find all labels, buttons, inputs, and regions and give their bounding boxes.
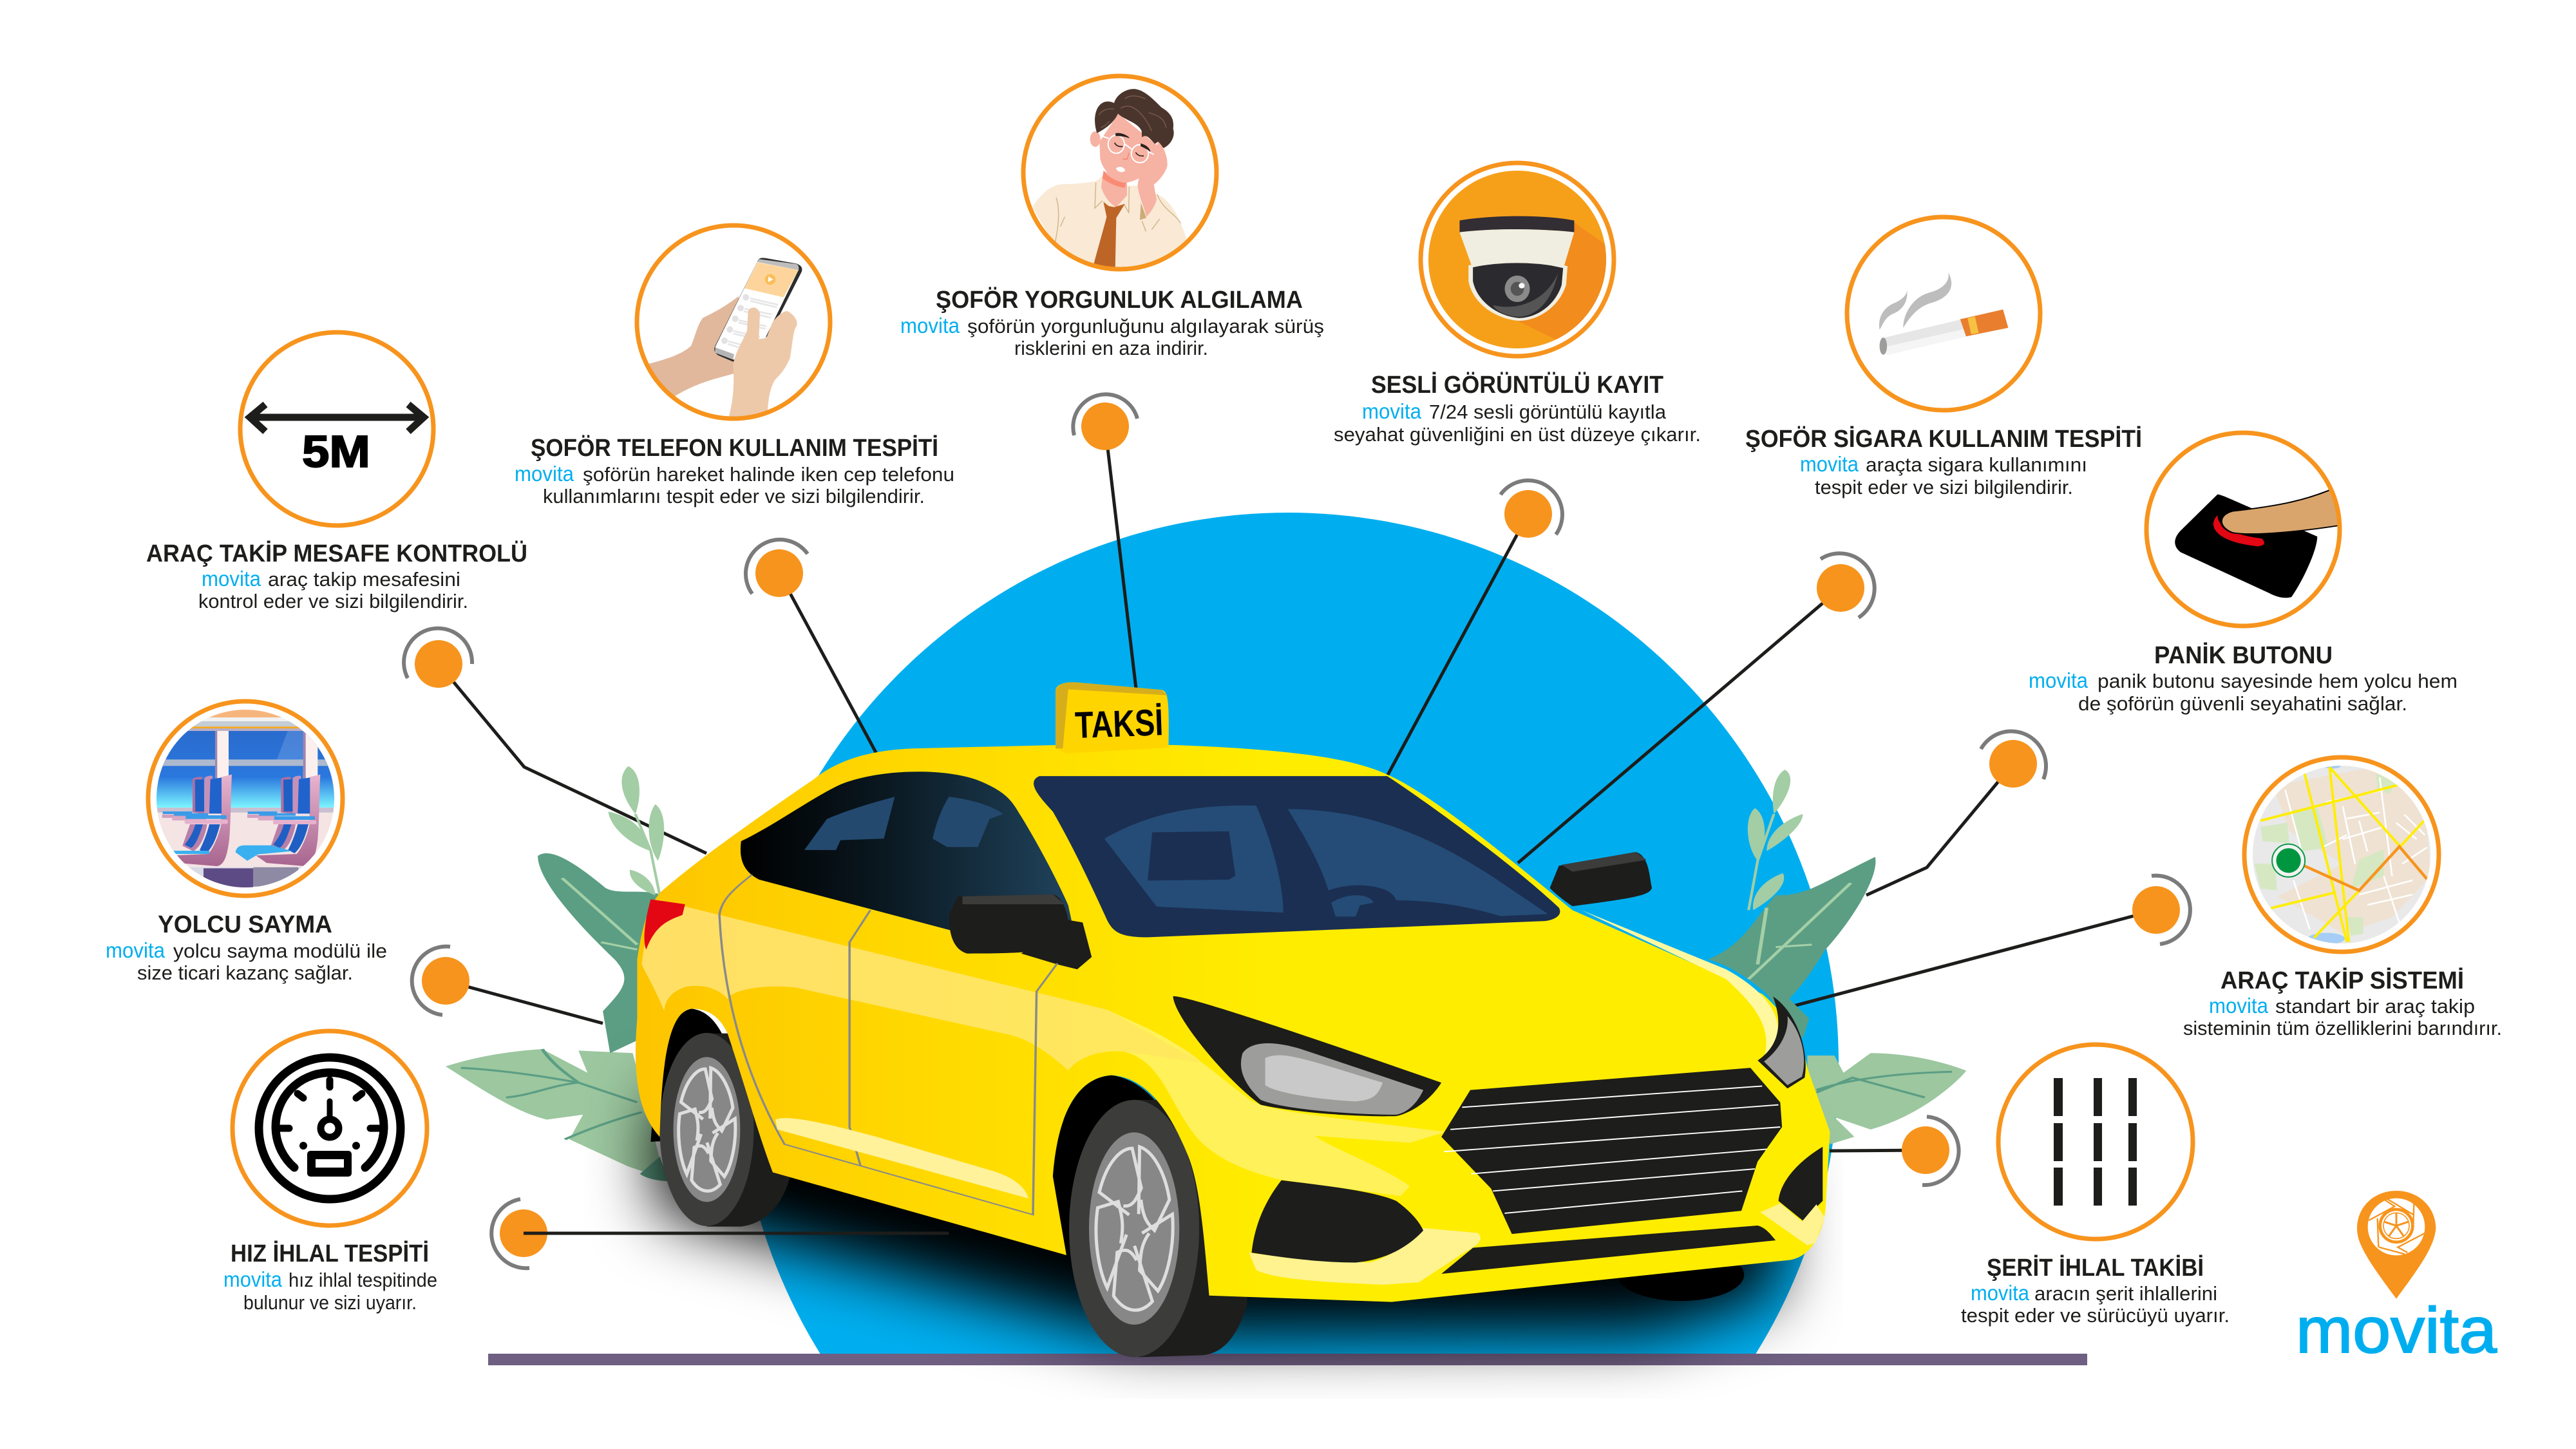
description: de şoförün güvenli seyahatini sağlar. (2078, 692, 2407, 715)
heading: ŞOFÖR TELEFON KULLANIM TESPİTİ (531, 434, 938, 462)
fender highlight (1107, 1010, 1446, 1196)
ground bar (488, 1354, 2087, 1365)
icon: hand holding phone (649, 258, 802, 416)
leader lines (439, 426, 2156, 1151)
heading: PANİK BUTONU (2154, 642, 2333, 669)
description (198, 567, 468, 612)
icon: road lanes (1998, 1045, 2193, 1239)
description: movita (900, 314, 960, 337)
description: movita (2029, 668, 2088, 692)
heading: HIZ İHLAL TESPİTİ (231, 1240, 429, 1267)
panel: vehicle tracking (2183, 757, 2502, 1039)
description: standart bir araç takip (2275, 995, 2475, 1018)
leaves left (446, 766, 669, 1181)
description: movita (1800, 452, 1859, 476)
right corner highlight (1760, 1204, 1824, 1245)
car body (636, 745, 1830, 1302)
panel: audio video recording (1334, 163, 1701, 446)
panel: passenger counting (106, 701, 387, 984)
heading: ARAÇ TAKİP MESAFE KONTROLÜ (146, 540, 527, 567)
description (1334, 399, 1701, 446)
marker dots (404, 394, 2190, 1268)
description: bulunur ve sizi uyarır. (243, 1291, 417, 1314)
right headlight (1757, 996, 1806, 1088)
icon: speedometer (232, 1031, 427, 1226)
description: movita (223, 1267, 283, 1291)
description: şoförün yorgunluğunu algılayarak sürüş (967, 315, 1324, 337)
heading: ARAÇ TAKİP SİSTEMİ (2221, 967, 2464, 994)
description: şoförün hareket halinde iken cep telefonu (583, 463, 954, 486)
description: risklerini en aza indirir. (1014, 337, 1208, 359)
ring (637, 225, 830, 419)
description: panik butonu sayesinde hem yolcu hem (2098, 670, 2458, 692)
icon: 5M distance (240, 332, 433, 526)
description: 7/24 sesli görüntülü kayıtla (1429, 401, 1667, 423)
icon: location pin (2357, 1191, 2436, 1299)
description (2029, 668, 2458, 715)
description (900, 314, 1324, 359)
panel: phone use (515, 225, 954, 507)
description (515, 462, 954, 507)
taxi sign box (1056, 682, 1169, 753)
icon: panic button (2175, 489, 2338, 598)
foliage behind the car (446, 766, 1966, 1181)
description: tespit eder ve sürücüyü uyarır. (1961, 1304, 2230, 1327)
icon: dome camera (1421, 163, 1618, 356)
speed leader line (524, 1231, 949, 1235)
hood edge highlight (1582, 910, 1778, 1063)
tail light (645, 899, 685, 949)
windshield (1034, 776, 1560, 937)
car shadow (657, 1095, 1777, 1336)
description: movita (1362, 399, 1422, 423)
description (1800, 452, 2087, 498)
description: hız ihlal tespitinde (289, 1269, 437, 1291)
description: araçta sigara kullanımını (1866, 453, 2087, 476)
ring (1023, 76, 1217, 269)
taxi illustration (636, 682, 1830, 1357)
description: movita (1971, 1281, 2030, 1305)
heading: ŞOFÖR YORGUNLUK ALGILAMA (936, 286, 1303, 314)
ring (2146, 433, 2340, 626)
panel: speed violation (223, 1031, 437, 1314)
leaves right (1708, 770, 1966, 1144)
right mirror (1550, 852, 1652, 906)
description: aracın şerit ihlallerini (2034, 1282, 2217, 1305)
bumper highlight (1249, 1228, 1481, 1285)
description: seyahat güvenliğini en üst düzeye çıkarır. (1334, 423, 1701, 446)
description: kontrol eder ve sizi bilgilendirir. (198, 590, 468, 612)
fog light left (1252, 1180, 1423, 1262)
grille (1441, 1068, 1782, 1234)
logo (2296, 1191, 2497, 1367)
icon: tired man (1033, 89, 1186, 267)
icon: cigarette (1847, 217, 2040, 410)
lower bumper slot (1441, 1226, 1776, 1274)
wheel arches (650, 1009, 1211, 1294)
background blue circle (737, 513, 1839, 1354)
side window (741, 772, 1080, 960)
heading: ŞOFÖR SİGARA KULLANIM TESPİTİ (1745, 425, 2142, 453)
description: movita (515, 462, 574, 486)
description: size ticari kazanç sağlar. (137, 961, 353, 984)
far rear wheel (1618, 1249, 1744, 1301)
panel: panic button (2029, 433, 2458, 715)
heading: SESLİ GÖRÜNTÜLÜ KAYIT (1371, 371, 1663, 399)
description: movita (106, 938, 166, 962)
rear wheel (659, 1033, 791, 1227)
wordmark: movita (2296, 1294, 2497, 1367)
description: yolcu sayma modülü ile (173, 940, 387, 962)
headlight (1173, 996, 1441, 1116)
heading: YOLCU SAYMA (158, 911, 332, 938)
left mirror (949, 895, 1092, 969)
description (2183, 994, 2502, 1039)
door lines (719, 875, 1057, 1215)
panel: driver fatigue (900, 76, 1324, 359)
panel: distance control (146, 332, 527, 612)
icon: map (2244, 757, 2441, 952)
sill highlight (775, 1118, 1028, 1198)
heading: ŞERİT İHLAL TAKİBİ (1987, 1255, 2204, 1282)
description: kullanımlarını tespit eder ve sizi bilgilendirir. (543, 485, 925, 507)
seats right (236, 775, 320, 866)
icon: bus seats (148, 701, 343, 896)
description (223, 1267, 437, 1314)
panel: lane violation (1961, 1045, 2230, 1327)
taxi sign text: TAKSİ (1074, 701, 1164, 746)
description: sisteminin tüm özelliklerini barındırır. (2183, 1017, 2502, 1039)
description: tespit eder ve sizi bilgilendirir. (1815, 476, 2073, 498)
body highlight (641, 900, 1202, 1070)
panel: cigarette detection (1745, 217, 2142, 498)
description (106, 938, 387, 984)
description: araç takip mesafesini (268, 568, 460, 591)
icon: 5M distance: 5M (302, 426, 370, 477)
seats left (162, 775, 232, 866)
description (1961, 1281, 2230, 1327)
front wheel (1069, 1100, 1247, 1357)
fog light right (1779, 1147, 1823, 1220)
description: movita (2209, 994, 2269, 1018)
description: movita (202, 567, 261, 591)
